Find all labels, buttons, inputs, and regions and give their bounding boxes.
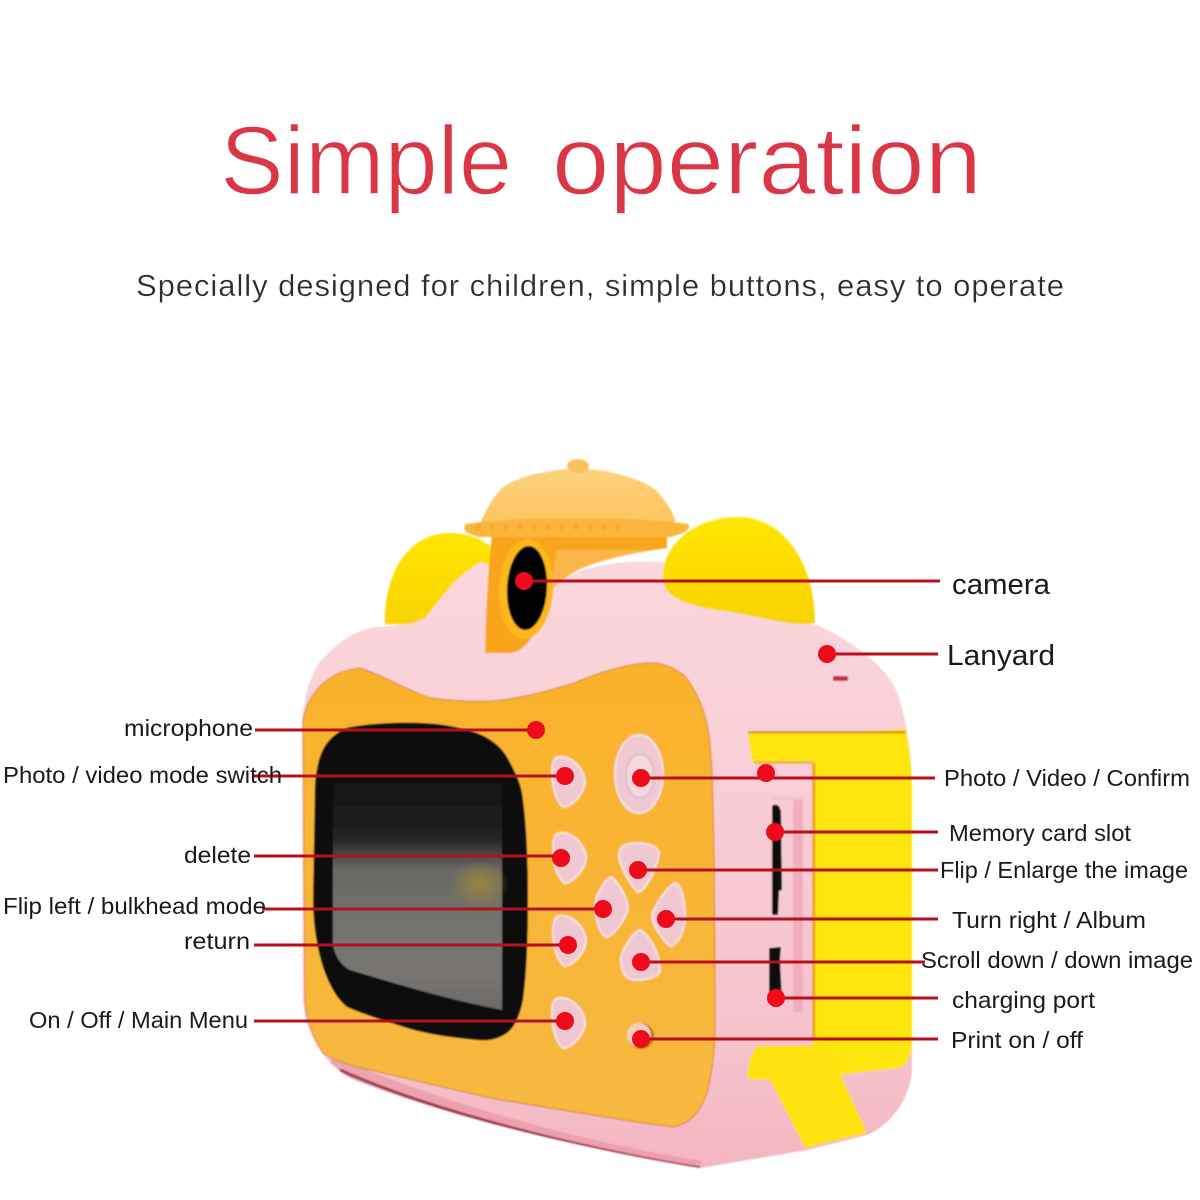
viewfinder brim — [464, 518, 689, 537]
right labels: Lanyard — [947, 640, 1055, 672]
brim bumps — [475, 524, 621, 530]
camera body pink — [302, 562, 912, 1168]
charging port — [769, 947, 782, 1000]
direction pad — [595, 843, 685, 980]
side door edge — [812, 763, 816, 1041]
left labels: Photo / video mode switch — [3, 762, 282, 788]
right labels: Memory card slot — [949, 820, 1132, 846]
memory card slot — [772, 805, 782, 915]
screen yellow glow — [450, 860, 510, 908]
left labels: microphone — [124, 715, 253, 741]
left labels: return — [184, 928, 250, 954]
lens ring — [496, 538, 556, 640]
side buttons — [552, 757, 586, 1048]
callout lines — [252, 581, 940, 1039]
kickstand — [747, 1045, 867, 1148]
lens — [505, 545, 549, 631]
right labels: Scroll down / down image — [921, 947, 1193, 973]
left labels: On / Off / Main Menu — [29, 1007, 248, 1033]
right labels: Turn right / Album — [952, 907, 1146, 933]
screen display — [333, 783, 502, 1010]
dome knob — [567, 459, 589, 473]
title: Simple — [220, 106, 512, 215]
power button big — [615, 735, 663, 813]
subtitle: Specially designed for children, simple buttons, easy to operate — [136, 268, 1064, 303]
lens tower — [485, 534, 557, 653]
viewfinder underside — [492, 534, 667, 592]
left labels: delete — [184, 842, 251, 868]
lanyard slot — [833, 676, 848, 681]
print button — [627, 1023, 654, 1049]
right ear — [663, 517, 815, 624]
camera illustration — [302, 459, 912, 1168]
right labels: camera — [952, 569, 1051, 601]
port recess strip — [770, 797, 803, 1012]
right labels: Photo / Video / Confirm — [944, 765, 1190, 791]
left ear — [385, 533, 490, 625]
left labels — [3, 715, 282, 1033]
screen bezel — [313, 723, 528, 1040]
viewfinder dome — [481, 469, 676, 522]
right labels: charging port — [952, 987, 1096, 1013]
left labels: Flip left / bulkhead mode — [3, 893, 266, 919]
orange front panel — [303, 663, 715, 1127]
right labels: Print on / off — [951, 1027, 1084, 1053]
side grip yellow — [748, 729, 912, 1075]
title: operation — [552, 106, 982, 215]
right labels: Flip / Enlarge the image — [940, 857, 1188, 883]
dark bottom edge — [330, 1062, 700, 1168]
callout dots — [515, 572, 836, 1048]
right labels — [921, 569, 1193, 1053]
